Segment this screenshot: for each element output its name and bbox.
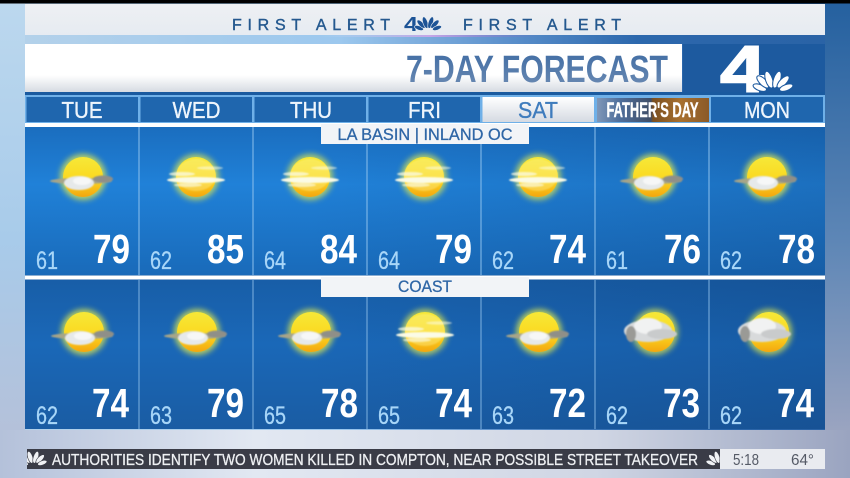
logo panel xyxy=(683,32,825,106)
day header row: THU xyxy=(290,97,332,123)
title bar xyxy=(25,44,682,92)
day header row: SAT xyxy=(518,97,558,123)
weather icons xyxy=(51,309,792,355)
low temperatures xyxy=(36,402,742,430)
high temperatures: 73 xyxy=(663,380,700,426)
low temperatures: 65 xyxy=(264,402,286,430)
low temperatures: 61 xyxy=(36,247,58,275)
high temperatures: 85 xyxy=(207,226,244,272)
high temperatures: 72 xyxy=(549,380,586,426)
low temperatures: 62 xyxy=(492,247,514,275)
panel: coast xyxy=(25,275,825,430)
clock and temperature xyxy=(720,449,825,469)
low temperatures: 62 xyxy=(150,247,172,275)
top alert strip xyxy=(25,4,825,35)
high temperatures: 84 xyxy=(320,226,357,272)
day header row: WED xyxy=(172,97,220,123)
low temperatures: 62 xyxy=(720,402,742,430)
region label: LA BASIN | INLAND OC xyxy=(338,125,512,144)
high temperatures: 74 xyxy=(549,226,586,272)
low temperatures: 61 xyxy=(606,247,628,275)
low temperatures: 62 xyxy=(606,402,628,430)
high temperatures: 79 xyxy=(435,226,472,272)
region label xyxy=(321,277,529,297)
high temperatures: 79 xyxy=(207,380,244,426)
high temperatures: 74 xyxy=(435,380,472,426)
first alert label right: FIRST ALERT xyxy=(463,17,621,34)
low temperatures: 64 xyxy=(264,247,286,275)
day header row: FATHER'S DAY xyxy=(606,99,698,122)
low temperatures: 62 xyxy=(36,402,58,430)
low temperatures: 63 xyxy=(492,402,514,430)
high temperatures xyxy=(92,380,814,426)
low temperatures xyxy=(36,247,742,275)
day header row: MON xyxy=(744,97,790,123)
weather icons xyxy=(50,154,797,200)
icon: peacock right xyxy=(706,452,720,466)
low temperatures: 62 xyxy=(720,247,742,275)
high temperatures: 78 xyxy=(321,380,358,426)
clock and temperature: 5:18 xyxy=(733,452,759,469)
day labels: TUE xyxy=(62,97,102,123)
high temperatures: 78 xyxy=(778,226,815,272)
blue rule under title xyxy=(25,92,825,95)
station 4 mark small: 4 xyxy=(404,14,419,36)
icon: station 4 logo: 4 xyxy=(720,32,766,106)
icon: peacock xyxy=(752,70,794,93)
day header row: FRI xyxy=(408,97,441,123)
headline: AUTHORITIES IDENTIFY TWO WOMEN KILLED IN COMPTON, NEAR POSSIBLE STREET TAKEOVER xyxy=(52,452,698,469)
high temperatures: 74 xyxy=(777,380,814,426)
station 4 mark small xyxy=(404,14,442,36)
low temperatures: 64 xyxy=(378,247,400,275)
high temperatures: 74 xyxy=(92,380,129,426)
region label: COAST xyxy=(398,277,452,296)
first alert label left: FIRST ALERT xyxy=(232,17,390,34)
icon: peacock left xyxy=(27,452,47,466)
high temperatures: 76 xyxy=(664,226,701,272)
panel: la basin inland oc xyxy=(25,123,825,276)
low temperatures: 65 xyxy=(378,402,400,430)
low temperatures: 63 xyxy=(150,402,172,430)
title: 7-DAY FORECAST xyxy=(406,49,668,91)
day header row xyxy=(25,95,825,123)
high temperatures xyxy=(93,226,815,272)
clock and temperature: 64° xyxy=(791,452,814,469)
high temperatures: 79 xyxy=(93,226,130,272)
news ticker xyxy=(18,449,735,469)
